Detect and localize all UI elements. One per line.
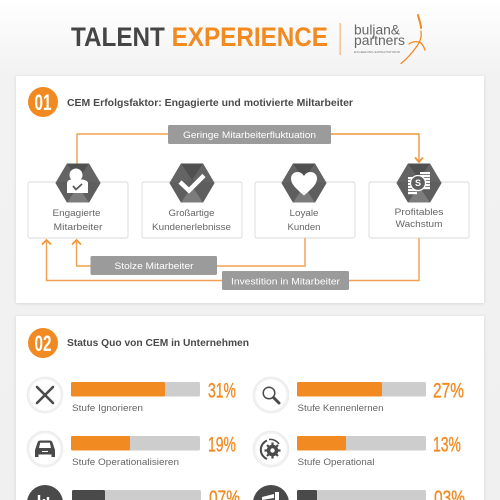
stat: Stufe Ignorieren 31%	[27, 377, 236, 413]
label: Engagierte	[52, 208, 100, 219]
label: Stufe Operationalisieren	[72, 457, 179, 467]
percentage: 13%	[433, 434, 461, 456]
label: Investition in Mitarbeiter: Investition in Mitarbeiter	[231, 276, 340, 288]
label: Kunden	[288, 222, 320, 233]
label: Stolze Mitarbeiter: Stolze Mitarbeiter	[114, 261, 194, 272]
logo: buljan & partners	[340, 15, 425, 64]
percentage: 19%	[208, 434, 236, 456]
badge: 02: 02	[34, 331, 52, 356]
icon: heart	[282, 164, 326, 202]
bar	[71, 436, 200, 450]
stat: Stufe Operationalisieren 19%	[27, 431, 236, 467]
badge: 01: 01	[34, 90, 52, 115]
bar	[71, 382, 200, 396]
percentage: 27%	[433, 380, 464, 402]
icon: cross	[27, 377, 63, 413]
card: Loyale Kunden	[255, 164, 355, 238]
arrow: top connector to Profitables Wachstum	[331, 134, 423, 162]
card: Profitables Wachstum	[369, 164, 469, 238]
heading: panel 1: CEM Erfolgsfaktor: Engagierte und motivierte Miltarbeiter	[67, 97, 353, 109]
label: Geringe Mitarbeiterfluktuation	[168, 125, 331, 144]
label: Großartige	[168, 208, 214, 219]
icon: employee	[56, 164, 100, 202]
label: Profitables	[394, 207, 444, 218]
bar	[297, 436, 426, 450]
card: Engagierte Mitarbeiter	[28, 164, 128, 238]
icon: gear with arrow	[253, 431, 289, 467]
panel: CEM Erfolgsfaktor	[16, 76, 484, 303]
bar	[297, 382, 426, 396]
stat: 07%	[27, 485, 240, 500]
logo: buljan & partners: EXCEEDING EXPECTATIONS	[354, 50, 400, 54]
title: TALENT EXPERIENCE	[71, 22, 328, 52]
label: Stolze Mitarbeiter	[90, 256, 217, 275]
heading: panel 2: Status Quo von CEM in Unternehmen	[67, 337, 249, 349]
label: Kundenerlebnisse	[152, 222, 231, 233]
bar	[297, 490, 426, 500]
label: Loyale	[290, 208, 318, 219]
label: Stufe Operational	[298, 457, 375, 467]
label: Stufe Ignorieren	[72, 403, 143, 413]
panel: Status Quo	[16, 316, 484, 500]
card: Großartige Kundenerlebnisse	[142, 164, 242, 238]
logo: buljan & partners: partners	[354, 33, 405, 48]
label: Stufe Kennenlernen	[298, 403, 384, 413]
badge: 01	[28, 87, 58, 117]
stat: 03%	[253, 485, 465, 500]
stat: Stufe Kennenlernen 27%	[253, 377, 464, 413]
bar	[72, 490, 201, 500]
stat: Stufe Operational 13%	[253, 431, 461, 467]
percentage: 31%	[208, 380, 236, 402]
icon: coins: S	[415, 178, 421, 188]
icon: check	[170, 164, 214, 202]
icon: dark chart	[27, 485, 63, 500]
label: Mitarbeiter	[54, 222, 102, 233]
icon: car	[27, 431, 63, 467]
arrow: Loyale Kunden to Engagierte Mitarbeiter	[72, 238, 305, 266]
label: Investition in Mitarbeiter	[222, 271, 349, 290]
logo: buljan & partners: buljan&	[354, 22, 400, 38]
label: Geringe Mitarbeiterfluktuation: Geringe Mitarbeiterfluktuation	[183, 130, 316, 141]
icon: magnifier	[253, 377, 289, 413]
icon: dark flag	[253, 485, 289, 500]
badge: 02	[28, 328, 58, 358]
label: Wachstum	[396, 219, 443, 230]
arrow: top connector to Engagierte Mitarbeiter	[77, 134, 169, 164]
arrow: Profitables Wachstum to Engagierte Mitarbeiter	[42, 238, 419, 280]
